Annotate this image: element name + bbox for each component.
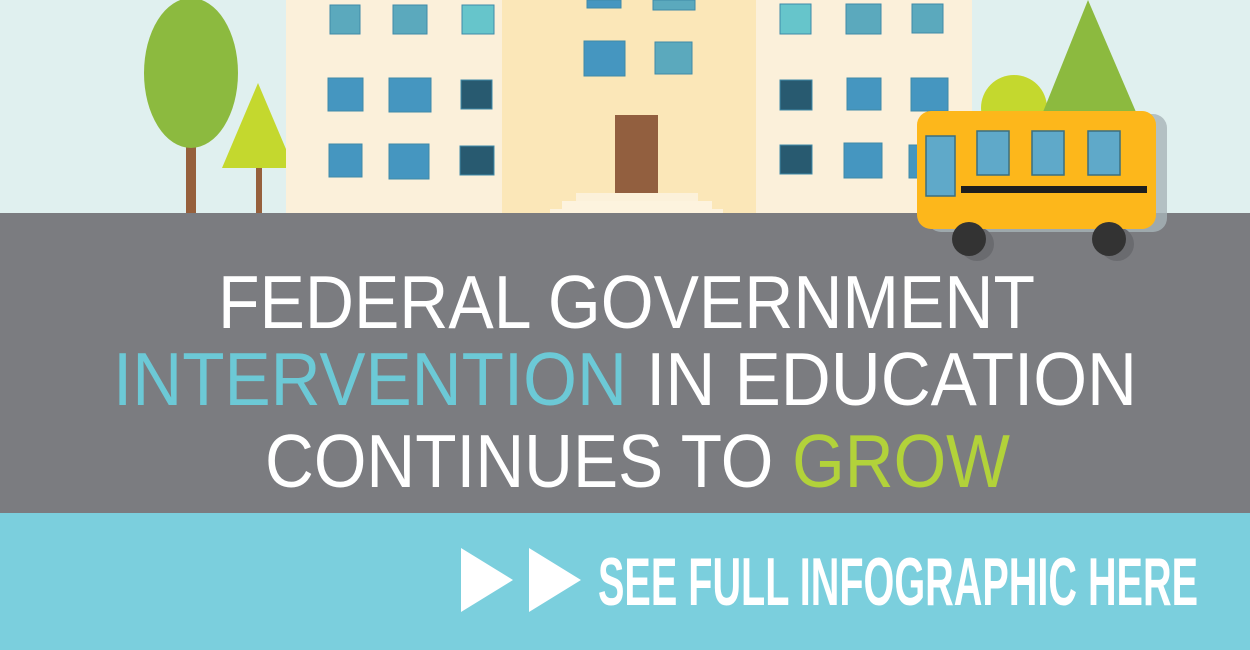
tree: small triangle <box>222 83 294 213</box>
building: school <box>286 0 972 213</box>
sky background <box>0 0 1250 214</box>
title line 2: INTERVENTION IN EDUCATION <box>113 337 1137 421</box>
title line 3: CONTINUES TO GROW <box>265 419 1010 503</box>
icon: school bus <box>917 111 1167 261</box>
bottom call-to-action band <box>0 513 1250 650</box>
road band <box>0 213 1250 513</box>
tree: tall oval <box>144 0 238 213</box>
trees behind bus <box>981 0 1136 141</box>
icon: double play arrows <box>461 548 581 612</box>
title <box>113 260 1137 503</box>
title line 1: FEDERAL GOVERNMENT <box>218 260 1035 344</box>
